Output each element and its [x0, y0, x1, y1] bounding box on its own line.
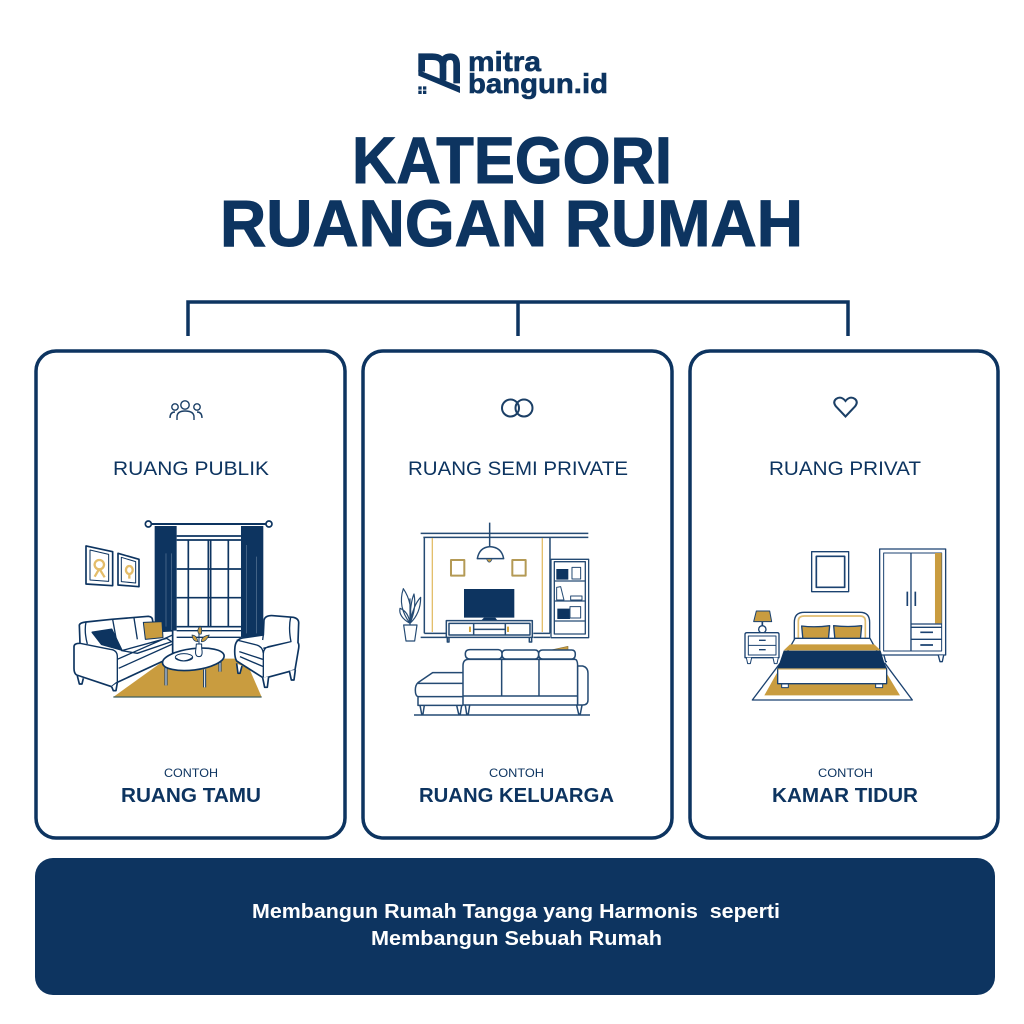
heading: ruang publik: RUANG PUBLIK — [113, 459, 269, 480]
curtains — [155, 526, 263, 637]
coffee table — [166, 660, 220, 687]
wardrobe — [880, 549, 946, 655]
frames — [451, 560, 526, 576]
heading: ruang semi private: RUANG SEMI PRIVATE — [408, 459, 628, 480]
potted plant — [400, 589, 421, 625]
logo text: mitra — [468, 46, 541, 77]
tv console — [446, 621, 532, 637]
logo: mitrabangun.id: bangun.id — [468, 68, 608, 99]
wall frames — [86, 546, 113, 586]
bed — [778, 638, 887, 684]
banner text: Membangun Rumah Tangga yang Harmonis seperti — [252, 901, 780, 923]
illustration: living room — [74, 521, 299, 697]
rug — [113, 659, 262, 697]
curtain rod — [151, 521, 266, 527]
icon: logo mark — [418, 57, 460, 94]
pillows — [802, 626, 830, 640]
icon: rings — [502, 400, 532, 416]
title: RUANGAN RUMAH — [220, 186, 803, 260]
window — [177, 536, 241, 637]
wall and shelf lines — [421, 533, 588, 637]
armchair — [235, 616, 299, 678]
bed headboard — [794, 612, 870, 642]
label: contoh: CONTOH — [818, 766, 873, 780]
label: contoh: CONTOH — [164, 766, 218, 780]
illustration: family room — [400, 523, 590, 715]
sofa — [548, 646, 568, 651]
example: ruang tamu: RUANG TAMU — [121, 785, 261, 807]
banner text — [252, 901, 780, 950]
navy pillow — [92, 629, 122, 650]
pendant lamp — [477, 523, 504, 559]
heading: ruang privat: RUANG PRIVAT — [769, 459, 921, 480]
bookshelf — [551, 559, 589, 638]
example: ruang keluarga: RUANG KELUARGA — [419, 785, 614, 807]
illustration: bedroom — [745, 549, 946, 700]
panel: ruang publik — [36, 351, 345, 838]
vase and plant — [197, 627, 200, 644]
television — [464, 589, 514, 618]
example: kamar tidur: KAMAR TIDUR — [772, 785, 919, 807]
title — [220, 123, 803, 260]
banner — [35, 858, 995, 995]
icon: people — [170, 401, 202, 420]
wall picture — [812, 552, 849, 592]
panel: ruang semi private — [363, 351, 672, 838]
gold pillow — [143, 622, 163, 639]
banner text: Membangun Sebuah Rumah — [371, 928, 662, 950]
connector lines — [188, 302, 848, 336]
icon: heart — [834, 398, 857, 416]
sofa — [74, 616, 173, 687]
title: KATEGORI — [352, 123, 672, 197]
label: contoh: CONTOH — [489, 766, 544, 780]
logo: mitrabangun.id — [418, 46, 608, 99]
panel: ruang privat — [690, 351, 998, 838]
rug — [752, 663, 912, 700]
nightstand and lamp — [754, 611, 772, 622]
